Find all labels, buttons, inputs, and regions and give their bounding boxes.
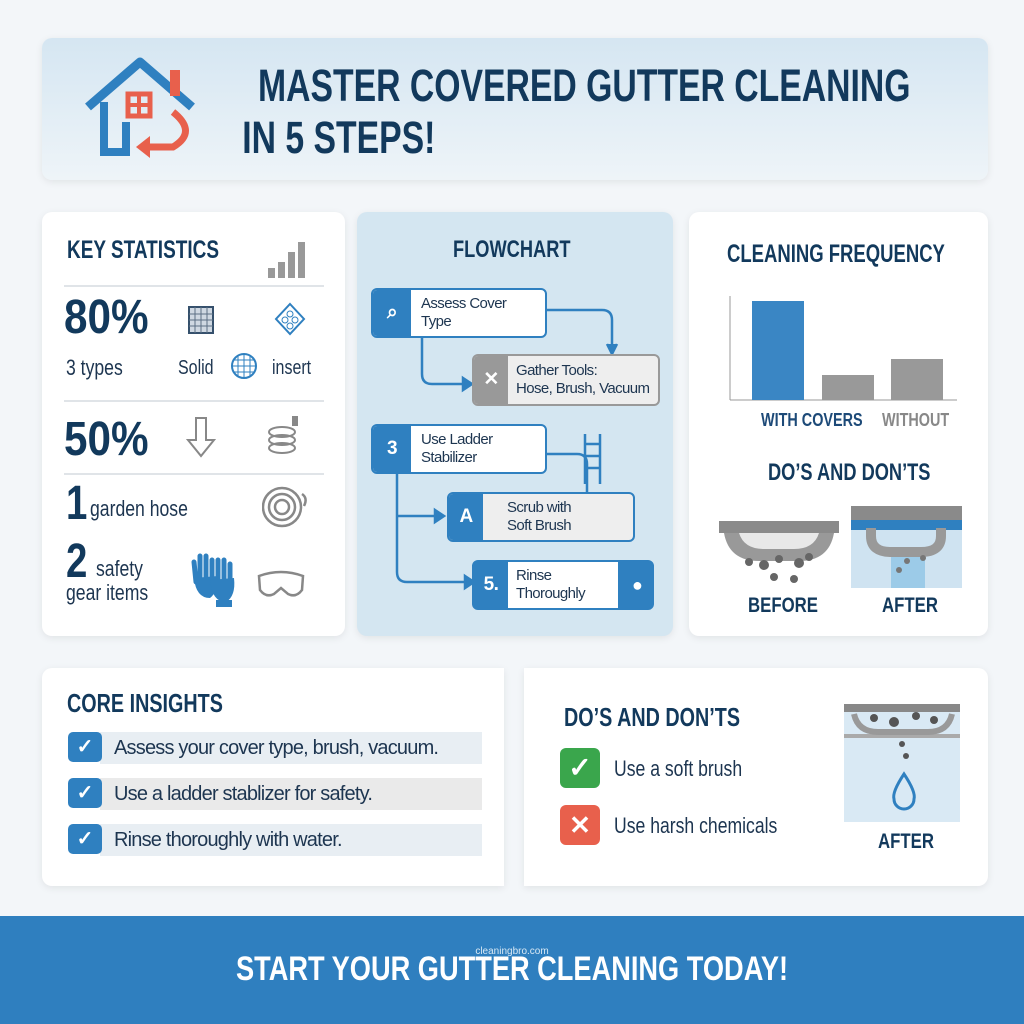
heading: FLOWCHART [453,236,571,263]
step 4: Soft Brush [507,517,571,534]
step 5: ● [632,575,642,595]
stat garden hose: 1 [66,477,87,530]
panel: dos and donts: AFTER [878,830,934,853]
step 5 [472,560,654,610]
insight items: Assess your cover type, brush, vacuum. [114,737,438,759]
step 5: Rinse [516,567,551,584]
title [242,60,911,163]
step 2: Gather Tools: [516,362,597,379]
panel: dos and donts: Use a soft brush [614,756,742,781]
panel: key statistics: garden hose [90,496,188,521]
panel: flowchart [357,212,673,636]
step 2: Hose, Brush, Vacuum [516,380,649,397]
panel: dos and donts [524,668,988,886]
heading: KEY STATISTICS [67,236,219,264]
footer banner: START YOUR GUTTER CLEANING TODAY! [236,950,788,988]
title: MASTER COVERED GUTTER CLEANING [258,60,911,111]
step 1 [371,288,547,338]
panel: key statistics: 3 types [66,355,123,380]
step 5: 5. [484,574,498,595]
heading: CLEANING FREQUENCY [727,240,945,268]
step 1: ⌕ [387,302,397,323]
step 2: ✕ [483,369,499,390]
footer banner [0,916,1024,1024]
insight items: ✓ [77,736,93,758]
panel: cleaning frequency: WITHOUT [882,410,949,430]
panel: cleaning frequency: AFTER [882,594,938,617]
insight items: ✓ [77,782,93,804]
panel: key statistics [42,212,345,636]
dont item: ✕ [569,810,591,840]
insight items: Use a ladder stablizer for safety. [114,783,372,805]
icon: signal bars [268,242,305,278]
do item [560,748,600,788]
panel: key statistics: safety [96,556,143,581]
icon: house [85,58,195,158]
panel: key statistics: Solid [178,357,214,379]
step 2 [472,354,660,406]
title: IN 5 STEPS! [242,112,435,163]
panel: cleaning frequency: WITH COVERS [761,410,863,430]
stat 80%: 80% [64,291,149,344]
insight items: ✓ [77,828,93,850]
stat 50%: 50% [64,413,149,466]
arrows [396,308,618,590]
step 4: A [459,506,473,527]
step 4 [447,492,635,542]
header card [42,38,988,180]
step 3: Stabilizer [421,449,477,466]
panel: key statistics: gear items [66,580,148,605]
before image [719,521,839,583]
after image [844,704,960,822]
step 1: Type [421,313,451,330]
heading: DO’S AND DON’TS [564,702,740,732]
dont item [560,805,600,845]
step 1: Assess Cover [421,295,506,312]
step 3: 3 [387,438,397,459]
heading: CORE INSIGHTS [67,688,223,718]
insight items: Rinse thoroughly with water. [114,829,342,851]
step 4: Scrub with [507,499,571,516]
step 3 [371,424,547,474]
panel: core insights [42,668,504,886]
do item: ✓ [568,752,592,783]
step 5: Thoroughly [516,585,585,602]
panel: dos and donts: Use harsh chemicals [614,813,777,838]
heading dos: DO’S AND DON’TS [768,459,930,486]
panel: key statistics: insert [272,357,311,379]
after image [851,506,962,588]
panel: cleaning frequency [689,212,988,636]
stat safety gear: 2 [66,535,87,588]
panel: cleaning frequency: BEFORE [748,594,818,617]
step 3: Use Ladder [421,431,493,448]
footer banner: cleaningbro.com [475,946,549,957]
bar chart [730,296,957,400]
insight items [68,732,482,856]
